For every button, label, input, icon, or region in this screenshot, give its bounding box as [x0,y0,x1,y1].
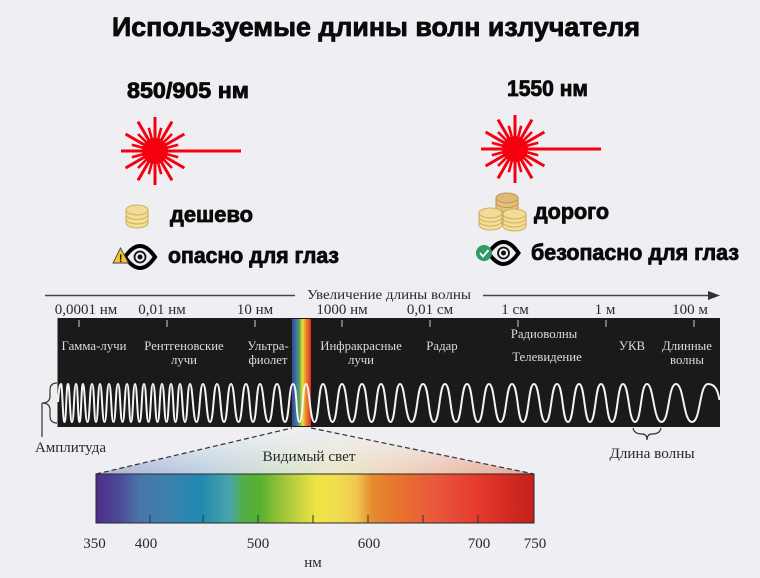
wavelength scale labels: 0,0001 нм [55,302,118,318]
wavelength scale labels [55,302,708,318]
title: Используемые длины волн излучателя [112,12,640,42]
label: expensive: дорого [534,199,609,224]
label: amplitude: Амплитуда [35,440,106,456]
spectrum scale labels: 700 [468,536,490,552]
spectrum scale labels: 500 [247,536,269,552]
visible rainbow strip [292,319,311,426]
check badge [476,245,492,261]
icon: laser left [121,117,241,185]
band labels: лучи [348,353,374,367]
band labels: фиолет [248,353,288,367]
back stack [496,193,518,217]
tick marks [79,320,694,327]
panel: electromagnetic spectrum [58,318,720,427]
spectrum scale labels: 750 [524,536,546,552]
panel: 850/905 nm [113,78,339,268]
label: cheap: дешево [170,202,253,227]
wave [58,384,720,422]
spectrum scale labels: 350 [83,536,106,552]
left stack [479,208,502,230]
band labels: волны [670,353,704,367]
label: wavelength: Длина волны [609,445,695,462]
visible spectrum bar [96,474,534,523]
warning sign: ! [119,253,123,265]
icon: coin stacks [479,193,526,231]
icon: eye with warning [113,246,155,268]
axis: increasing wavelength: Увеличение длины волны [307,288,472,303]
spectrum scale labels: 400 [135,536,157,552]
wavelength scale labels: 0,01 нм [138,302,186,318]
right stack [503,209,526,231]
heading: 850/905 nm: 850/905 нм [127,78,249,103]
icon: coins [126,205,148,228]
visible light projection [96,428,534,474]
band labels: Радар [426,339,458,353]
band labels: Рентгеновские [144,339,224,353]
spectrum scale labels: 600 [358,536,380,552]
eye [125,246,155,268]
icon: eye with check [476,242,518,264]
band labels [62,327,712,367]
band labels: Радиоволны [511,327,578,341]
band labels: Инфракрасные [320,339,402,353]
band labels: Гамма-лучи [62,339,127,353]
band labels: лучи [171,353,197,367]
label: visible light: Видимый свет [262,448,356,465]
wavelength scale labels: 100 м [672,302,708,318]
icon: laser right [481,115,601,183]
band labels: Ультра- [247,339,289,353]
wavelength scale labels: 1 см [501,302,529,318]
band labels: Длинные [662,339,712,353]
amplitude brace [42,383,57,437]
band labels: УКВ [619,339,645,353]
label: safe for eyes: безопасно для глаз [531,240,739,265]
label: dangerous for eyes: опасно для глаз [168,243,339,268]
wavelength scale labels: 10 нм [237,302,274,318]
band labels: Телевидение [512,350,582,364]
spectrum scale labels: нм [304,555,322,571]
wavelength scale labels: 0,01 см [407,302,454,318]
spectrum scale labels [83,536,546,571]
heading: 1550 nm: 1550 нм [507,76,588,101]
wavelength brace [633,428,661,440]
eye [488,242,518,264]
panel: 1550 nm [476,76,739,265]
axis: increasing wavelength [45,288,720,303]
wavelength scale labels: 1000 нм [316,302,368,318]
wavelength scale labels: 1 м [595,302,616,318]
